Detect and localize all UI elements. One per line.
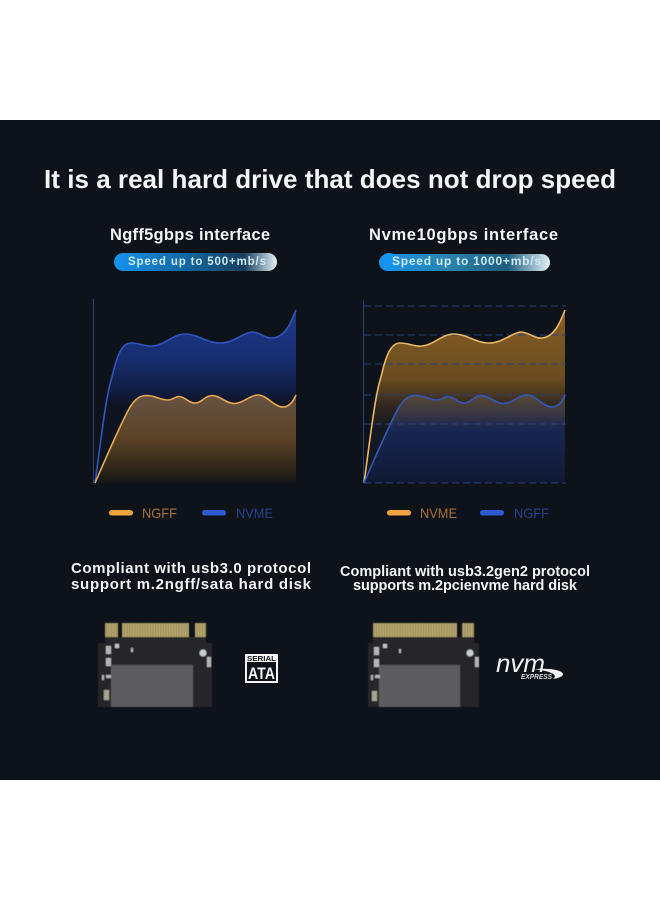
logo: Serial ATA [245,654,278,683]
area chart: NGFF vs NVME [94,299,296,483]
speed badge: 500+mb/s [114,253,277,271]
legend: NGFF and NVME [109,505,273,521]
speed badge: 500+mb/s: Speed up to 500+mb/s [128,256,266,268]
legend: NVME and NGFF: NVME [420,505,457,521]
caption: usb3.0 compliance: Compliant with usb3.0 protocol [71,560,311,577]
logo: NVM Express: EXPRESS [521,672,552,681]
icon: M.2 SATA SSD module [98,623,212,707]
heading: Nvme10gbps interface: Nvme10gbps interface [369,226,558,244]
caption: usb3.2gen2 compliance: Compliant with usb3.2gen2 protocol [340,564,590,580]
heading: Ngff5gbps interface: Ngff5gbps interface [110,226,270,244]
area chart: NVME vs NGFF [364,300,566,483]
logo: NVM Express [496,650,563,681]
logo: Serial ATA: SERIAL [247,656,277,663]
legend: NGFF and NVME: NGFF [142,505,177,521]
speed badge: 1000+mb/s: Speed up to 1000+mb/s [392,254,541,268]
legend: NVME and NGFF: NGFF [514,505,549,521]
panel: NGFF 5Gbps [71,226,312,707]
dark background panel [0,120,660,780]
legend: NGFF and NVME: NVME [236,505,273,521]
caption: usb3.2gen2 compliance [340,564,590,594]
icon: M.2 NVMe SSD module [368,623,479,707]
logo: Serial ATA: ATA [248,664,275,683]
caption: usb3.0 compliance: support m.2ngff/sata hard disk [71,576,312,593]
caption: usb3.0 compliance [71,560,312,593]
speed badge: 1000+mb/s [379,253,550,271]
caption: usb3.2gen2 compliance: supports m.2pcienvme hard disk [353,578,578,594]
title: It is a real hard drive that does not drop speed [44,164,616,194]
logo: NVM Express: nvm [496,650,545,678]
legend: NVME and NGFF [387,505,549,521]
panel: NVMe 10Gbps [340,226,590,707]
